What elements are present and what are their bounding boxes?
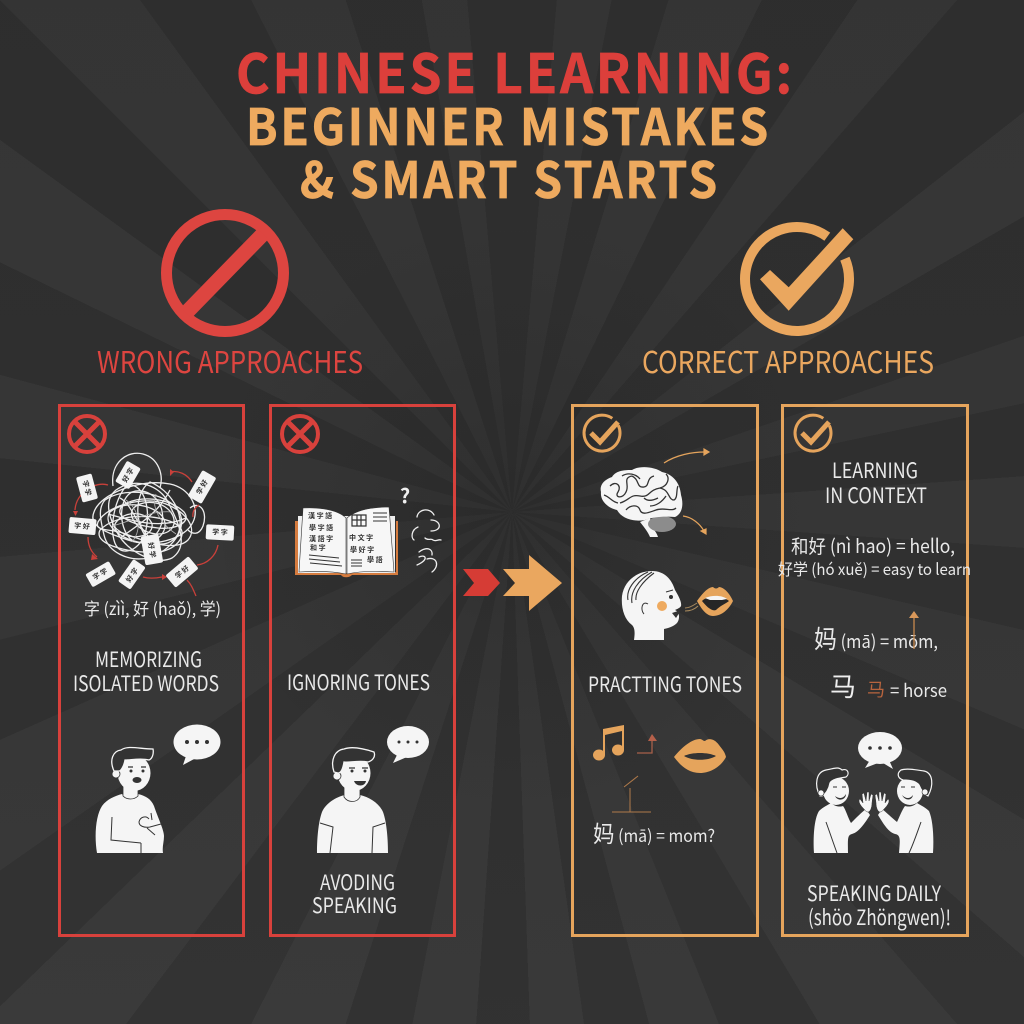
- panel: practicing tones: [572, 406, 758, 936]
- label: avoiding speaking: [312, 867, 397, 920]
- illustration: two people high-fiving: [814, 732, 933, 853]
- arrow: orange arrow: [503, 555, 562, 611]
- illustration: tangled string and word tiles: 学 好: [194, 478, 211, 497]
- illustration: person with speech bubble: [317, 726, 429, 853]
- illustration: open book: 學 字 語: [309, 523, 333, 533]
- illustration: open book: 學 語: [367, 555, 383, 565]
- speech bubble: [387, 726, 429, 763]
- title: BEGINNER MISTAKES: [246, 88, 771, 160]
- illustration: tangled string and word tiles: 字 好: [74, 521, 90, 532]
- icon: large check mark: [745, 227, 853, 331]
- icon: rising tone arrow: [637, 734, 657, 753]
- illustration: brain: [601, 467, 682, 537]
- arrow: red chevron: [463, 569, 500, 596]
- illustration: open book: 漢 語 字: [309, 534, 333, 544]
- label: speaking daily: (shöo Zhöngwen)!: [808, 902, 951, 932]
- text: horse character: 马: [830, 667, 856, 704]
- title: [236, 30, 795, 213]
- heading: wrong approaches: WRONG APPROACHES: [97, 338, 363, 382]
- label: memorizing isolated words: MEMORIZING: [95, 644, 202, 674]
- icon: microphone stand: [612, 776, 651, 812]
- illustration: person with speech bubble: [96, 724, 220, 853]
- illustration: tangled string and word tiles: 学 好: [173, 564, 192, 581]
- illustration: tangled string and word tiles: 字 学: [80, 479, 93, 497]
- illustration: open book: [295, 507, 398, 577]
- text: orange horse character: 马: [867, 676, 885, 702]
- icon: check badge: [584, 415, 620, 451]
- title: & SMART STARTS: [300, 141, 720, 213]
- panel: memorizing isolated words: [60, 406, 244, 936]
- label: memorizing isolated words: ISOLATED WORDS: [73, 668, 219, 698]
- label: speaking daily: [807, 878, 951, 932]
- label: avoiding speaking: SPEAKING: [312, 890, 397, 920]
- icon: check badge: [795, 415, 831, 451]
- illustration: open book: 和 字: [310, 543, 326, 553]
- label: avoiding speaking: AVODING: [320, 867, 395, 897]
- illustration: tangled string and word tiles: 学 字: [212, 527, 228, 538]
- speech bubble: [174, 724, 220, 765]
- label: practicing tones: PRACTTING TONES: [588, 669, 742, 699]
- illustration: tangled string and word tiles: 好 学: [145, 542, 158, 559]
- icon: red x badge: [69, 416, 105, 452]
- illustration: tangled string and word tiles: 字 学: [91, 566, 110, 583]
- heading: correct approaches: CORRECT APPROACHES: [642, 338, 934, 382]
- text: example characters: 字 (zìì, 好 (haǒ), 学): [84, 595, 221, 620]
- illustration: open book: 學 好 字: [350, 545, 374, 555]
- panel: learning in context: [778, 406, 971, 936]
- icon: confused squiggles: [412, 510, 441, 572]
- illustration: head speaking: [622, 571, 698, 640]
- text: tone example: 妈 (mā) = mom?: [593, 815, 715, 849]
- label: learning in context: [825, 455, 927, 510]
- illustration: open book: 漢 字 語: [308, 511, 332, 521]
- panel: ignoring tones: [270, 406, 454, 936]
- icon: red x badge: [282, 416, 318, 452]
- label: ignoring tones: IGNORING TONES: [287, 667, 430, 697]
- text: hello and easy to learn examples: [778, 532, 971, 580]
- arrow: small rising tone: [909, 611, 919, 649]
- icon: question mark: ?: [400, 480, 410, 509]
- icon: music notes: [593, 725, 624, 760]
- title: CHINESE LEARNING:: [236, 30, 795, 109]
- illustration: tangled string and word tiles: 好 字: [124, 566, 141, 585]
- text: equals horse: = horse: [890, 677, 947, 703]
- icon: lips: [674, 739, 726, 773]
- arrows: from brain: [664, 449, 709, 534]
- label: memorizing isolated words: [73, 644, 219, 698]
- illustration: orange speaking lips: [697, 587, 733, 616]
- illustration: tangled string and word tiles: [68, 453, 234, 596]
- person: left: [814, 768, 873, 853]
- text: hello and easy to learn examples: 和好 (nì hao) = hello,: [791, 532, 955, 559]
- text: mom example: 妈 (mā) = mōm,: [814, 620, 938, 656]
- label: learning in context: LEARNING: [832, 455, 918, 485]
- text: hello and easy to learn examples: 好学 (hó xuě) = easy to learn: [778, 556, 971, 580]
- speech bubble: [858, 732, 902, 769]
- illustration: open book: 中 文 字: [349, 533, 373, 543]
- icon: prohibition sign: [166, 214, 284, 332]
- person: right: [875, 769, 933, 853]
- illustration: tangled string and word tiles: 好 字: [120, 466, 137, 485]
- label: learning in context: IN CONTEXT: [825, 480, 927, 510]
- label: speaking daily: SPEAKING DAILY: [807, 878, 942, 908]
